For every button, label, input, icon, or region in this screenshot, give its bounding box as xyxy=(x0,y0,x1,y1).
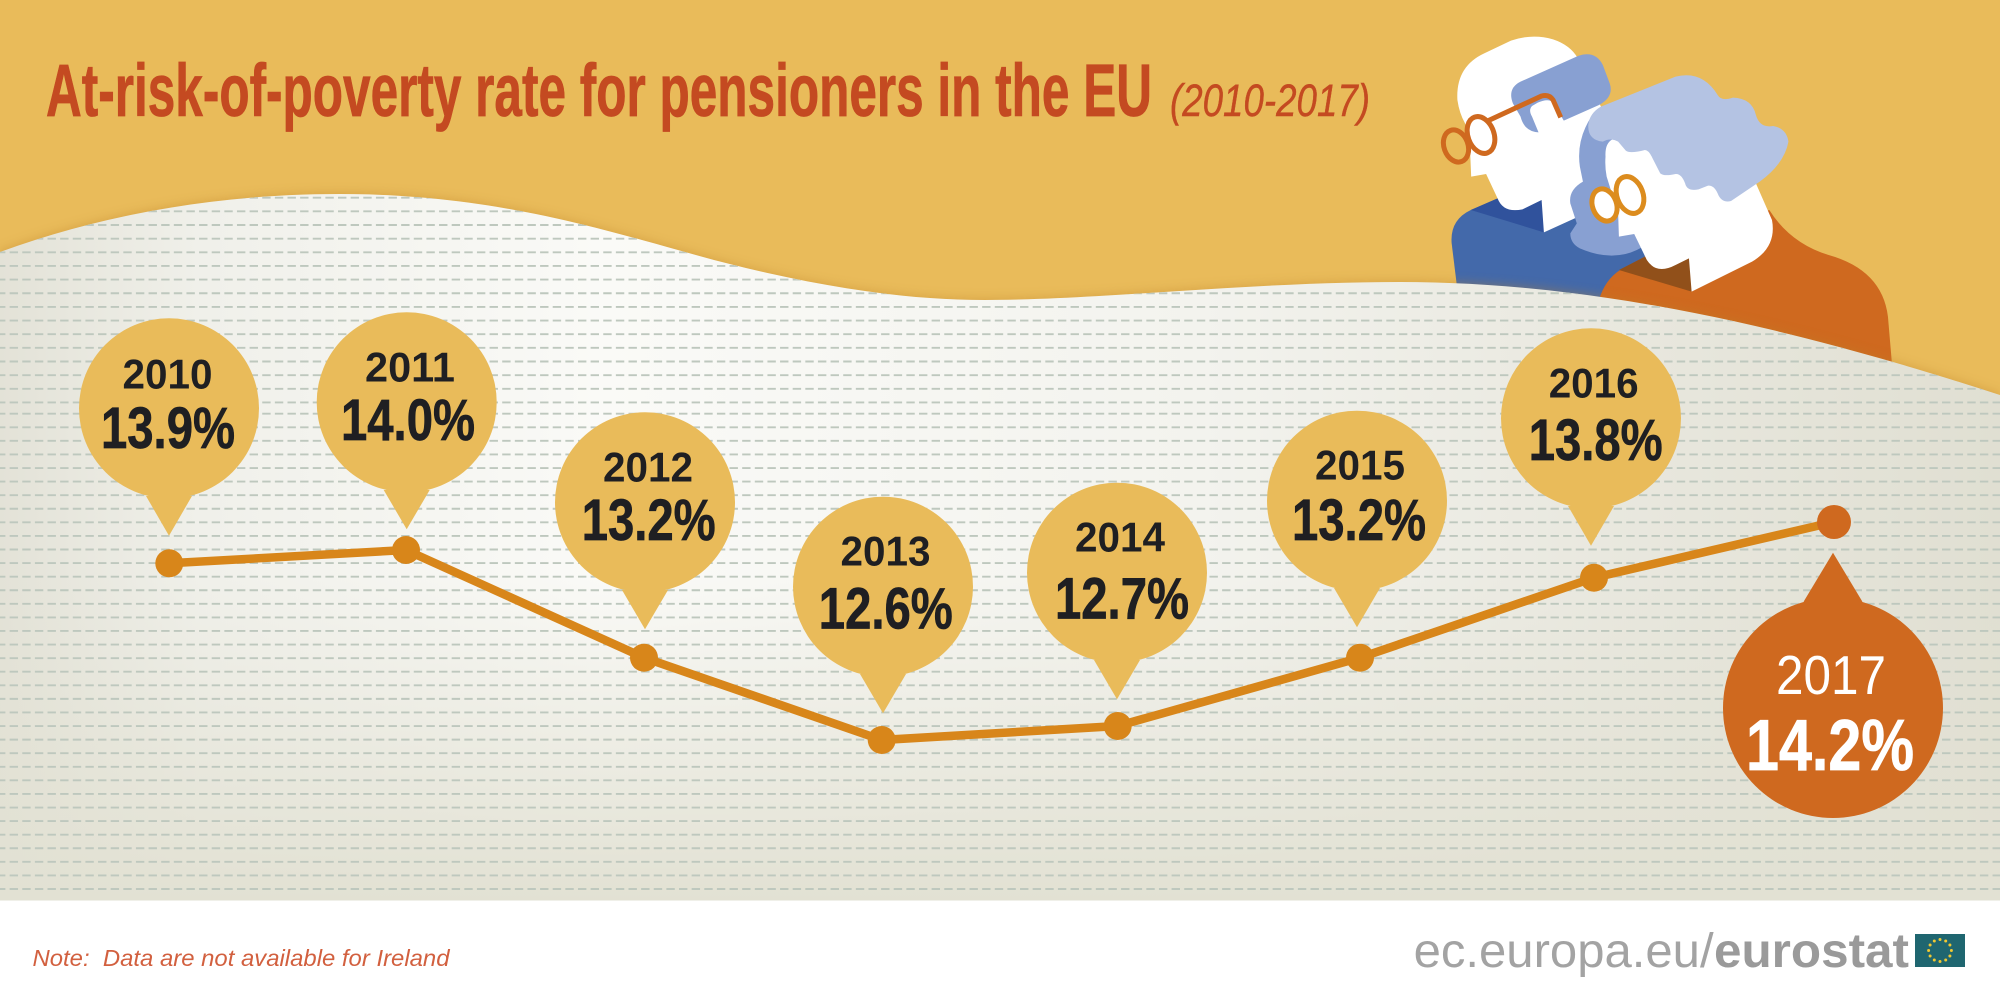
callout: 2014 xyxy=(1027,483,1207,699)
callout: 2011: 14.0% xyxy=(341,388,475,453)
footnote: Note: Data are not available for Ireland xyxy=(32,945,451,971)
callout: 2017 highlighted: 14.2% xyxy=(1746,706,1914,786)
callout: 2012: 2012 xyxy=(603,444,693,491)
footer: source url: eurostat xyxy=(1714,925,1909,978)
callout: 2017 highlighted xyxy=(1723,553,1943,818)
callout: 2010 xyxy=(79,318,259,536)
callout: 2015 xyxy=(1267,411,1447,627)
man: glasses arm xyxy=(1486,95,1561,122)
callout: 2017 highlighted: 2017 xyxy=(1776,644,1886,706)
data point 2011 xyxy=(392,536,420,564)
background: header band xyxy=(0,0,2000,420)
icon: woman's glasses xyxy=(1588,173,1649,225)
man: hair xyxy=(1511,54,1611,132)
woman: collar xyxy=(1619,257,1692,292)
callout: 2016: 13.8% xyxy=(1529,408,1663,473)
callout: 2014: 12.7% xyxy=(1055,566,1189,631)
callout: 2013 xyxy=(793,497,973,713)
data point 2015 xyxy=(1346,644,1374,672)
callout: 2015: 2015 xyxy=(1315,441,1405,488)
callout: 2010: 2010 xyxy=(122,350,212,397)
woman: face xyxy=(1605,139,1773,292)
data point 2017 xyxy=(1817,505,1851,539)
woman: jacket xyxy=(1599,210,1892,362)
man: head xyxy=(1457,37,1601,232)
data point 2013 xyxy=(868,726,896,754)
callout: 2014: 2014 xyxy=(1075,514,1166,561)
data point 2014 xyxy=(1104,712,1132,740)
icon: man's glasses xyxy=(1439,113,1500,166)
callout: 2011 xyxy=(317,312,497,529)
callout: 2013: 2013 xyxy=(840,528,930,575)
callout: 2016 xyxy=(1501,328,1681,546)
callout: 2016: 2016 xyxy=(1549,360,1639,407)
man: jacket xyxy=(1452,198,1645,300)
line chart: series xyxy=(169,522,1834,740)
callout: 2011: 2011 xyxy=(365,344,455,391)
callout: 2012 xyxy=(555,412,735,629)
panel: paper background xyxy=(0,180,2000,900)
callout: 2010: 13.9% xyxy=(101,396,235,461)
woman: back hair xyxy=(1570,117,1676,256)
subtitle: period: (2010-2017) xyxy=(1170,75,1370,126)
footer: white band xyxy=(0,900,2000,1000)
illustration: elderly couple xyxy=(1452,37,1892,362)
data point 2016 xyxy=(1580,564,1608,592)
footer: source url: ec.europa.eu/ xyxy=(1414,925,1714,978)
callout: 2015: 13.2% xyxy=(1292,488,1426,553)
man: shirt collar xyxy=(1471,197,1545,232)
data point 2010 xyxy=(155,549,183,577)
icon: EU flag xyxy=(1915,934,1965,967)
data point 2012 xyxy=(630,644,658,672)
callout: 2012: 13.2% xyxy=(582,488,716,553)
callout: 2013: 12.6% xyxy=(819,576,953,641)
title: At-risk-of-poverty rate for pensioners in the EU xyxy=(46,49,1152,132)
woman: front hair xyxy=(1588,75,1788,201)
